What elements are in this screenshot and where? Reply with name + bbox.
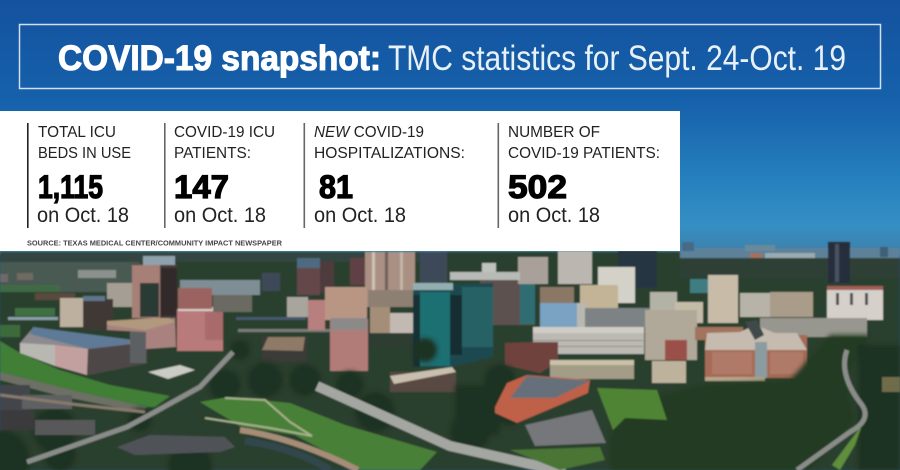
stat: new COVID-19 hospitalizations: 81 xyxy=(319,169,353,205)
parking lot xyxy=(525,410,606,446)
main green lawn xyxy=(0,341,170,407)
stat: COVID-19 ICU patients: 147 xyxy=(174,169,229,205)
red and grey mid blocks xyxy=(178,273,280,312)
light towers top centre xyxy=(450,251,657,303)
stat: COVID-19 ICU patients xyxy=(164,123,275,228)
pink tower foreground xyxy=(330,318,368,371)
stat: total ICU beds: TOTAL ICU xyxy=(38,124,116,141)
mixed pink cluster xyxy=(287,287,414,348)
stat: COVID-19 ICU patients: PATIENTS: xyxy=(174,145,251,162)
stat: number of COVID-19 patients: NUMBER OF xyxy=(508,124,600,141)
creek bank xyxy=(0,372,147,412)
white hospital right xyxy=(827,286,883,320)
small tan building xyxy=(262,337,307,362)
grey tower behind teal xyxy=(480,278,535,325)
low grey long building xyxy=(760,318,867,337)
cream low building xyxy=(390,367,456,392)
tan mid building xyxy=(107,317,176,349)
red building with grey roof xyxy=(495,375,590,423)
beige tower xyxy=(365,252,415,307)
teal glass tower xyxy=(413,283,493,367)
tan low buildings xyxy=(550,340,687,383)
roads xyxy=(0,350,865,470)
white roof xyxy=(148,365,195,379)
tall tower left xyxy=(132,256,177,318)
stat: COVID-19 ICU patients: COVID-19 ICU xyxy=(174,124,275,141)
stat: total ICU beds xyxy=(27,123,131,228)
houses bottom left xyxy=(0,385,235,455)
stat: total ICU beds: 1,115 xyxy=(38,169,103,205)
title bold part: COVID-19 snapshot: xyxy=(58,39,381,78)
stat: number of COVID-19 patients xyxy=(498,123,660,228)
garage building xyxy=(20,327,147,375)
park lawn and paths xyxy=(200,397,862,470)
aerial photo of Texas Medical Center xyxy=(0,242,900,470)
title box outline xyxy=(20,24,880,88)
far left low buildings xyxy=(0,270,132,337)
dark tall tower far right xyxy=(828,242,850,283)
sky background xyxy=(0,0,900,255)
pink building xyxy=(177,307,224,351)
white stats panel xyxy=(0,111,680,251)
pedestrian skybridges xyxy=(236,317,330,332)
round tower xyxy=(60,296,113,330)
stat: total ICU beds: on Oct. 18 xyxy=(37,204,129,227)
stat: new COVID-19 hospitalizations: NEW COVID-19 xyxy=(314,124,424,141)
white long building xyxy=(533,327,644,354)
blue building xyxy=(540,285,650,330)
stat: total ICU beds: BEDS IN USE xyxy=(38,145,131,162)
tree masses xyxy=(0,335,900,470)
stat: new COVID-19 hospitalizations xyxy=(304,123,465,228)
stat: number of COVID-19 patients: COVID-19 PATIENTS: xyxy=(508,145,660,162)
stat: number of COVID-19 patients: 502 xyxy=(508,169,567,205)
title banner xyxy=(20,24,880,88)
distant skyline xyxy=(0,242,900,292)
source line: SOURCE: TEXAS MEDICAL CENTER/COMMUNITY IMPACT NEWSPAPER xyxy=(27,240,282,248)
brown brick building xyxy=(505,342,558,373)
brick hospital complex xyxy=(705,320,807,381)
stat: COVID-19 ICU patients: on Oct. 18 xyxy=(174,204,266,227)
right of centre buildings xyxy=(645,275,813,360)
green square xyxy=(597,388,667,430)
dark and brick towers centre-left xyxy=(297,252,447,295)
stat: new COVID-19 hospitalizations: on Oct. 18 xyxy=(314,204,406,227)
stat: number of COVID-19 patients: on Oct. 18 xyxy=(508,204,600,227)
stat: new COVID-19 hospitalizations: HOSPITALIZATIONS: xyxy=(314,145,465,162)
corner building far right xyxy=(882,377,900,392)
ground xyxy=(0,252,900,470)
